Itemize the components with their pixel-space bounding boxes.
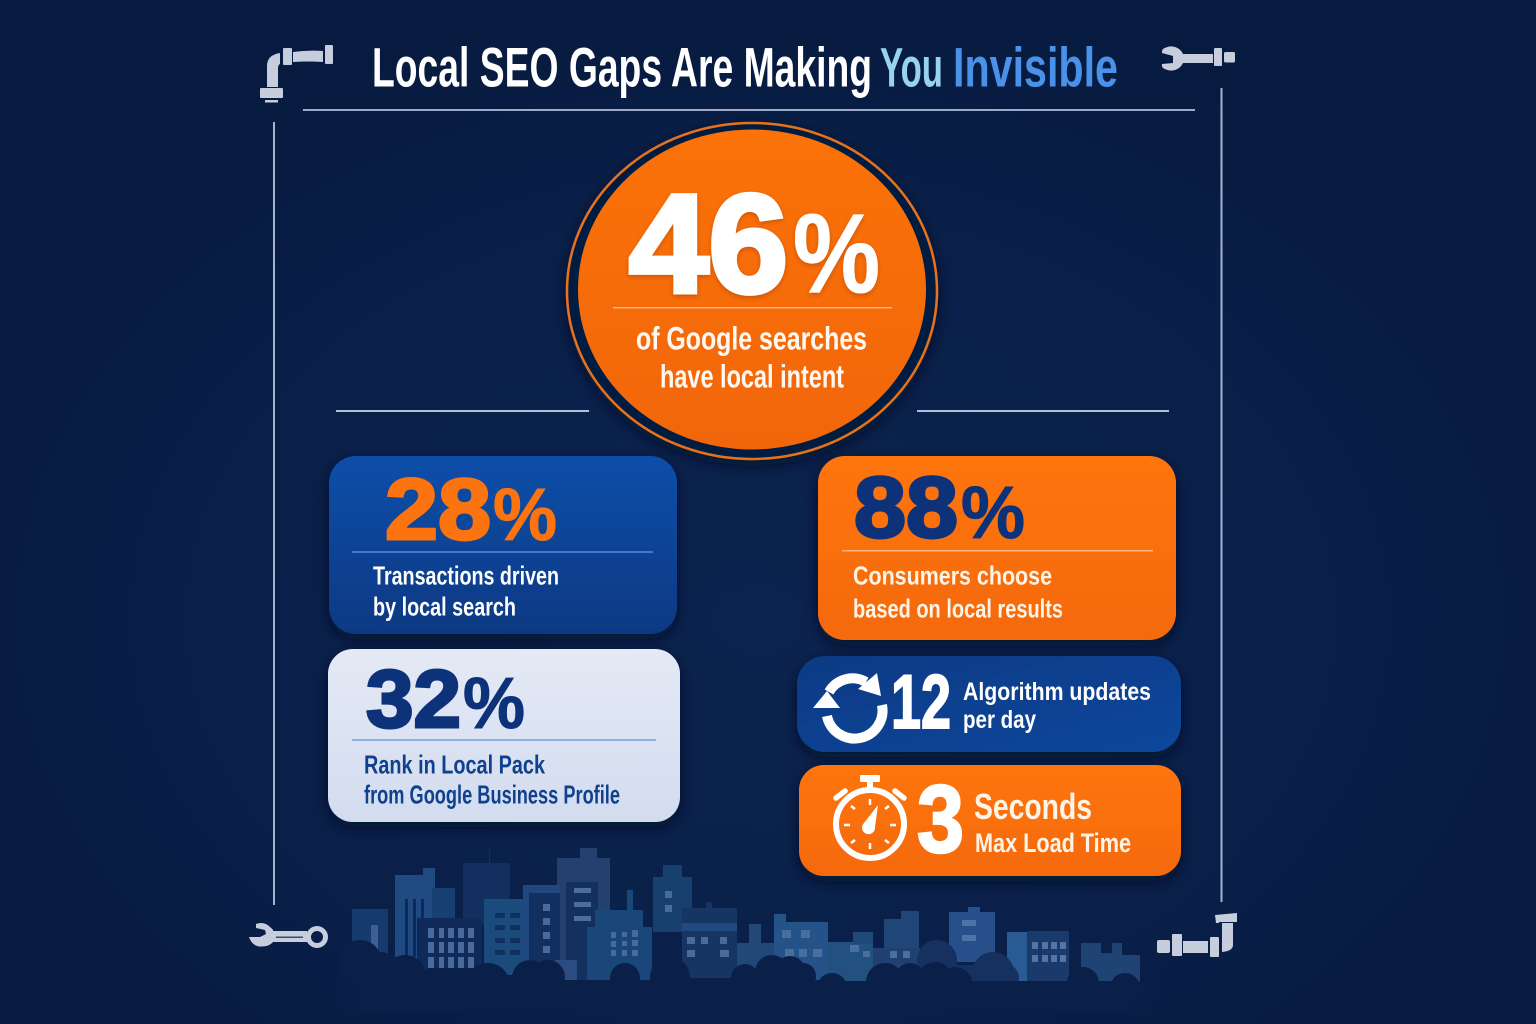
frame left line <box>273 122 275 905</box>
divider left <box>336 410 589 412</box>
card: 12 algorithm updates: Algorithm updates <box>963 678 1151 706</box>
card: 3 seconds <box>799 765 1181 876</box>
divider right <box>917 410 1169 412</box>
main stat caption <box>636 320 867 394</box>
circle ring <box>567 123 937 459</box>
icon: pipe elbow bottom right <box>1157 913 1237 957</box>
card: 32%: Rank in Local Pack <box>364 750 545 780</box>
card: 12 algorithm updates: 12 <box>891 660 951 745</box>
icon: stopwatch <box>836 775 904 858</box>
card: 88% <box>818 456 1176 640</box>
card: 32%: % <box>463 664 525 744</box>
card: 32% <box>328 649 680 822</box>
main stat number: 46 <box>629 165 788 322</box>
card: 28%: 28 <box>385 462 491 558</box>
card: 32%: 32 <box>366 654 461 745</box>
main stat circle <box>567 123 937 459</box>
main stat number <box>629 165 880 322</box>
main stat caption: have local intent <box>660 358 844 394</box>
skyline <box>330 848 1160 1011</box>
card: 88%: % <box>961 471 1025 554</box>
icon: wrench bottom left <box>249 923 328 948</box>
card: 28% <box>329 456 677 634</box>
card: 3 seconds: Max Load Time <box>975 828 1131 858</box>
card: 28%: % <box>493 473 557 556</box>
card: 88%: based on local results <box>853 594 1063 624</box>
circle fill <box>578 130 926 450</box>
card: 88%: 88 <box>854 460 958 556</box>
icon: pipe elbow top left <box>260 45 333 102</box>
header rule <box>303 109 1195 111</box>
card: 28%: Transactions driven <box>373 560 559 590</box>
frame right line <box>1220 88 1222 902</box>
icon: wrench top right <box>1162 46 1235 71</box>
card: 32%: from Google Business Profile <box>364 780 620 810</box>
title: Local SEO Gaps Are Making <box>372 36 872 98</box>
main stat caption: of Google searches <box>636 320 867 356</box>
card: 3 seconds: 3 <box>917 766 964 873</box>
card: 88%: Consumers choose <box>853 560 1052 590</box>
card: 12 algorithm updates <box>797 656 1181 752</box>
card: 12 algorithm updates: per day <box>963 706 1036 734</box>
title: You <box>880 36 943 98</box>
icon: refresh arrows <box>813 673 883 739</box>
title: Invisible <box>953 36 1118 98</box>
card: 28%: by local search <box>373 592 516 622</box>
card: 3 seconds: Seconds <box>974 786 1092 827</box>
main stat number: % <box>793 191 880 316</box>
